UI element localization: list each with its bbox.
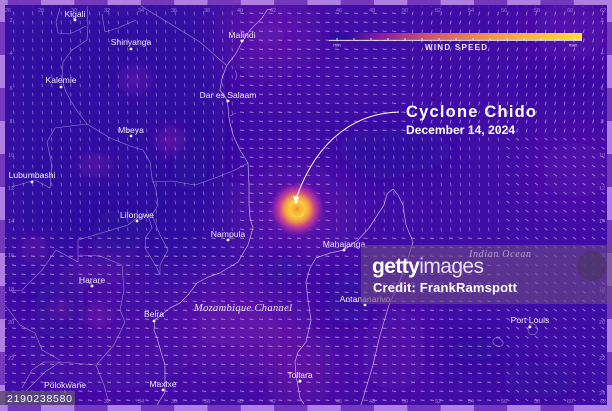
legend: wind speed colour scale	[329, 33, 582, 52]
title: Cyclone Chido: Cyclone Chido	[406, 103, 536, 121]
grid coordinate labels: 56	[501, 399, 507, 405]
grid coordinate labels: 42	[270, 399, 276, 405]
grid coordinate labels: 2	[9, 18, 13, 24]
grid coordinate labels: 12	[599, 186, 605, 192]
grid coordinate labels: 54	[468, 8, 474, 14]
subtitle: date: December 14, 2024	[406, 123, 515, 137]
grid coordinate labels: 52	[435, 8, 441, 14]
grid coordinate labels: 48	[369, 399, 375, 405]
grid coordinate labels: 46	[336, 399, 342, 405]
grid coordinate labels: 38	[204, 399, 210, 405]
water body label: Indian Ocean: Indian Ocean	[468, 249, 531, 260]
label: Kalemie: Kalemie	[45, 75, 77, 85]
grid coordinate labels: 48	[369, 8, 375, 14]
grid coordinate labels: 22	[8, 356, 14, 362]
grid coordinate labels: 20	[599, 320, 605, 326]
grid coordinate labels: 2	[600, 18, 604, 24]
grid coordinate labels: 18	[599, 287, 605, 293]
grid coordinate labels: 36	[171, 399, 177, 405]
grid coordinate labels: 34	[138, 8, 144, 14]
grid coordinate labels: 40	[237, 8, 243, 14]
grid coordinate labels: 50	[402, 8, 408, 14]
label: Port Louis: Port Louis	[511, 315, 549, 325]
grid coordinate labels: 16	[8, 253, 14, 259]
label: Maxixe: Maxixe	[149, 379, 177, 389]
grid coordinate labels: 4	[600, 51, 604, 57]
grid coordinate labels: 22	[599, 356, 605, 362]
Madagascar coastline	[295, 189, 413, 405]
label: Shinyanga: Shinyanga	[111, 37, 152, 47]
inland borders	[10, 6, 226, 291]
label: Mahajanga: Mahajanga	[323, 239, 365, 249]
label: Harare: Harare	[79, 275, 105, 285]
grid coordinate labels: 26	[5, 8, 11, 14]
legend: wind speed colour scale: max	[569, 42, 578, 48]
grid coordinate labels: 38	[204, 8, 210, 14]
grid coordinate labels: 32	[104, 8, 110, 14]
label: Kigali: Kigali	[64, 9, 86, 19]
grid coordinate labels: 6	[9, 86, 13, 92]
grid coordinate labels: 50	[402, 399, 408, 405]
grid coordinate labels: 14	[8, 219, 14, 225]
image ID tag: 2190238580	[7, 393, 72, 405]
label: Beira: Beira	[144, 309, 164, 319]
East Africa coastline	[154, 9, 272, 405]
grid coordinate labels: 40	[237, 399, 243, 405]
label: Malindi: Malindi	[228, 30, 256, 40]
label: Toliara: Toliara	[287, 370, 313, 380]
grid coordinate labels: 10	[599, 153, 605, 159]
watermark credit: Credit: FrankRamspott	[373, 280, 518, 295]
legend: wind speed colour scale: WIND SPEED	[425, 43, 487, 52]
watermark band	[361, 245, 612, 304]
grid coordinate labels: 12	[8, 186, 14, 192]
grid coordinate labels: 8	[600, 119, 604, 125]
legend: wind speed colour scale: min	[333, 42, 341, 48]
grid coordinate labels: 28	[38, 8, 44, 14]
grid coordinate labels: 42	[270, 8, 276, 14]
grid coordinate labels: 24	[599, 391, 605, 397]
grid coordinate labels: 18	[8, 287, 14, 293]
label: Dar es Salaam: Dar es Salaam	[200, 90, 256, 100]
label: Antananarivo: Antananarivo	[340, 294, 391, 304]
cyclone eye glow	[269, 181, 325, 237]
grid coordinate labels: 52	[435, 399, 441, 405]
grid coordinate labels: 6	[600, 86, 604, 92]
grid coordinate labels: 14	[599, 219, 605, 225]
grid coordinate labels: 36	[171, 8, 177, 14]
grid coordinate labels: 20	[8, 320, 14, 326]
grid coordinate labels: 4	[9, 51, 13, 57]
label: Lilongwe: Lilongwe	[120, 210, 154, 220]
grid coordinate labels: 32	[104, 399, 110, 405]
grid coordinate labels: 16	[599, 253, 605, 259]
grid coordinate labels: 34	[138, 399, 144, 405]
grid coordinate labels: 62	[600, 399, 606, 405]
label: Polokwane: Polokwane	[44, 380, 86, 390]
arrow pointing to the cyclone	[293, 112, 399, 205]
grid coordinate labels: 10	[8, 153, 14, 159]
watermark logo: gettyimages	[372, 255, 484, 278]
grid coordinate labels: 8	[9, 119, 13, 125]
grid coordinate labels: 30	[71, 8, 77, 14]
grid coordinate labels: 62	[600, 8, 606, 14]
label: Lubumbashi: Lubumbashi	[9, 170, 55, 180]
label: Nampula: Nampula	[211, 229, 245, 239]
label: Mbeya: Mbeya	[118, 125, 144, 135]
grid coordinate labels: 58	[534, 8, 540, 14]
water body label: Mozambique Channel: Mozambique Channel	[193, 303, 292, 314]
island outlines	[493, 324, 537, 346]
grid coordinate labels: 46	[336, 8, 342, 14]
grid coordinate labels: 56	[501, 8, 507, 14]
grid coordinate labels: 60	[567, 399, 573, 405]
grid coordinate labels: 54	[468, 399, 474, 405]
grid coordinate labels: 58	[534, 399, 540, 405]
grid coordinate labels: 60	[567, 8, 573, 14]
